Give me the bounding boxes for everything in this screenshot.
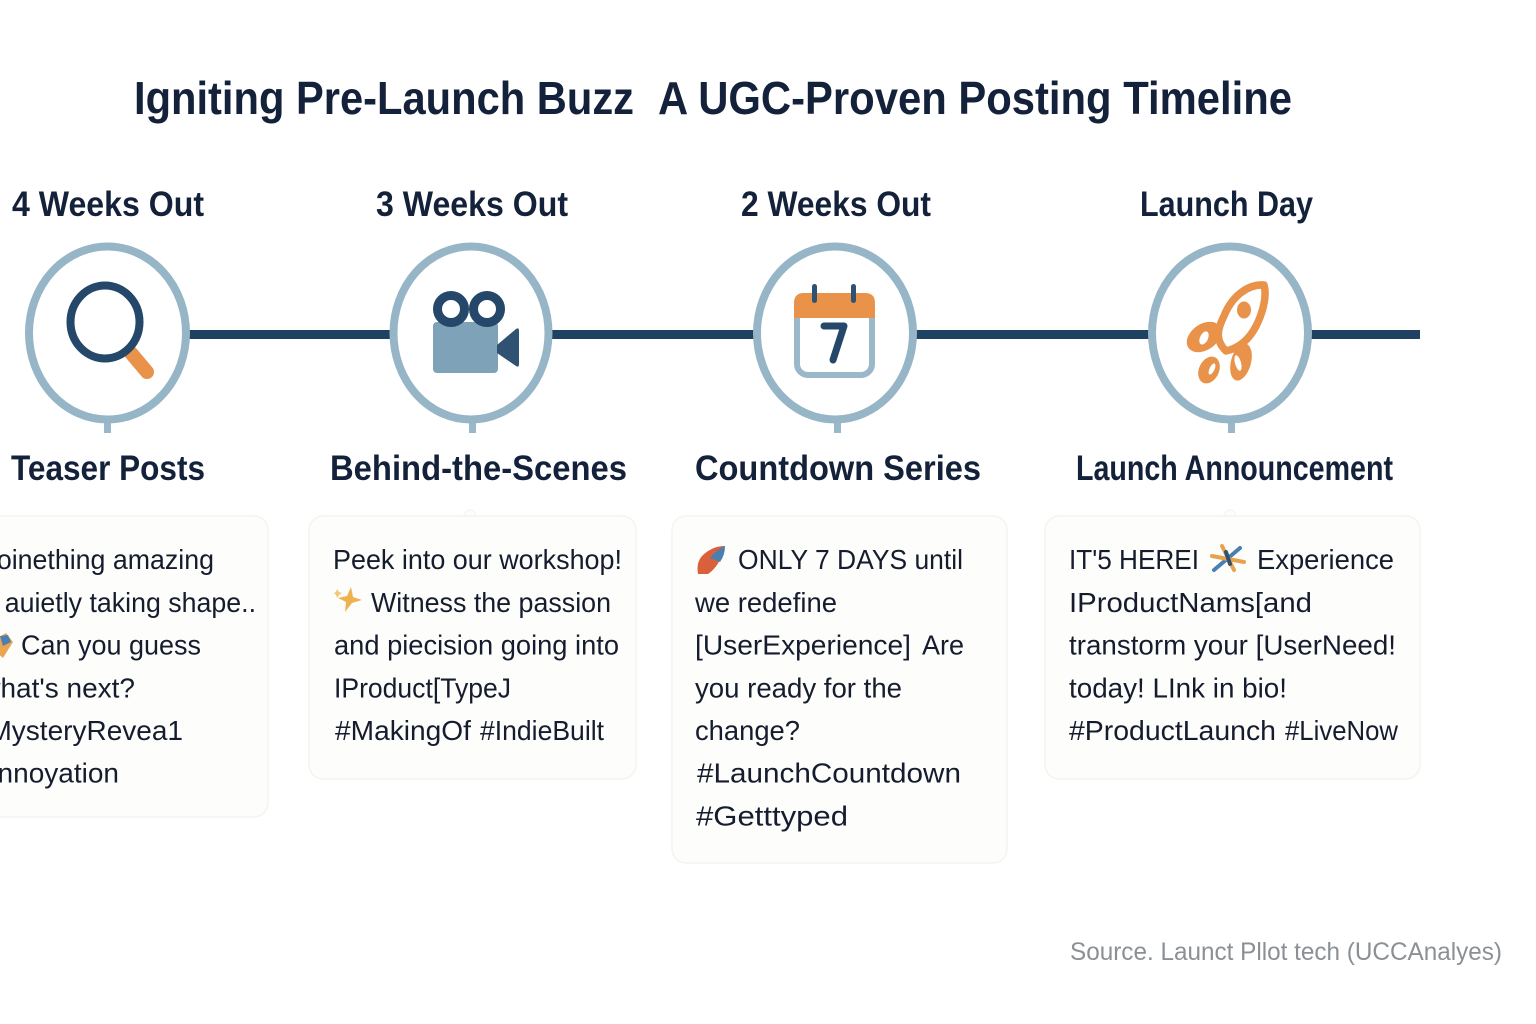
icon: sparkles emoji	[334, 587, 362, 612]
node ring	[394, 246, 548, 433]
subheading: Launch Announcement: Launch Announcement	[1076, 449, 1393, 488]
post text: [UserExperience]	[695, 630, 911, 660]
source note: Source. Launct Pllot tech (UCCAnalyes)	[1070, 938, 1502, 966]
node ring	[757, 246, 913, 433]
icon: video camera	[433, 296, 519, 373]
title	[134, 72, 1292, 124]
post text: #MakingOf	[335, 715, 471, 746]
icon: rocket emoji	[698, 546, 725, 574]
post text	[1069, 544, 1399, 746]
timeline connector line	[185, 330, 1420, 339]
title: Igniting Pre-Launch Buzz	[134, 72, 634, 124]
post text	[0, 544, 256, 788]
heading: 4 Weeks Out: 4 Weeks Out	[12, 185, 204, 224]
heading: 2 Weeks Out: 2 Weeks Out	[741, 185, 931, 224]
post text: IT'5 HEREI	[1069, 544, 1199, 575]
icon: rocket	[1181, 285, 1265, 387]
icon: calendar	[794, 284, 875, 375]
node ring	[1152, 246, 1308, 433]
post text: we redefine	[694, 587, 837, 618]
panel: teaser post copy	[0, 516, 268, 817]
post text: and piecision going into	[334, 630, 619, 660]
post text: transtorm your [UserNeed!	[1069, 630, 1396, 660]
icon: magnifying glass	[70, 286, 147, 372]
post text: change?	[695, 715, 800, 746]
post text	[333, 544, 622, 746]
phase 2: 3 weeks out	[309, 185, 636, 779]
post text: #LaunchCountdown	[697, 758, 961, 788]
heading: 3 Weeks Out: 3 Weeks Out	[376, 185, 568, 224]
icon: party popper emoji	[1212, 546, 1244, 570]
heading: Launch Day: Launch Day	[1140, 185, 1313, 224]
post text: Experience	[1257, 544, 1394, 575]
post text: Are	[922, 630, 964, 660]
post text: IProductNams[and	[1069, 587, 1312, 618]
post text: Peek into our workshop!	[333, 544, 622, 575]
phase 3: 2 weeks out	[672, 185, 1007, 863]
panel: behind-the-scenes post copy	[309, 510, 636, 779]
phase 4: launch day	[1045, 185, 1420, 779]
subheading: Teaser Posts: Teaser Posts	[11, 449, 205, 488]
post text: #LiveNow	[1285, 715, 1399, 746]
panel: launch announcement post copy	[1045, 510, 1420, 779]
post text: Can you guess	[21, 630, 201, 660]
node ring	[29, 246, 186, 433]
panel: countdown post copy	[672, 516, 1007, 863]
subheading: Behind-the-Scenes: Behind-the-Scenes	[330, 449, 627, 488]
title: A UGC-Proven Posting Timeline	[658, 72, 1292, 124]
phase 1: 4 weeks out	[0, 185, 268, 817]
post text: ONLY 7 DAYS until	[738, 544, 963, 575]
subheading: Countdown Series: Countdown Series	[695, 449, 981, 488]
post text: you ready for the	[695, 672, 902, 704]
post text: today! LInk in bio!	[1069, 672, 1287, 704]
post text: Witness the passion	[371, 587, 611, 618]
icon: gem emoji	[0, 633, 13, 658]
post text: #Getttyped	[696, 800, 848, 832]
post text: #IndieBuilt	[480, 715, 604, 746]
post text: #ProductLaunch	[1069, 715, 1276, 746]
post text	[694, 544, 964, 832]
post text: IProduct[TypeJ	[334, 672, 511, 704]
